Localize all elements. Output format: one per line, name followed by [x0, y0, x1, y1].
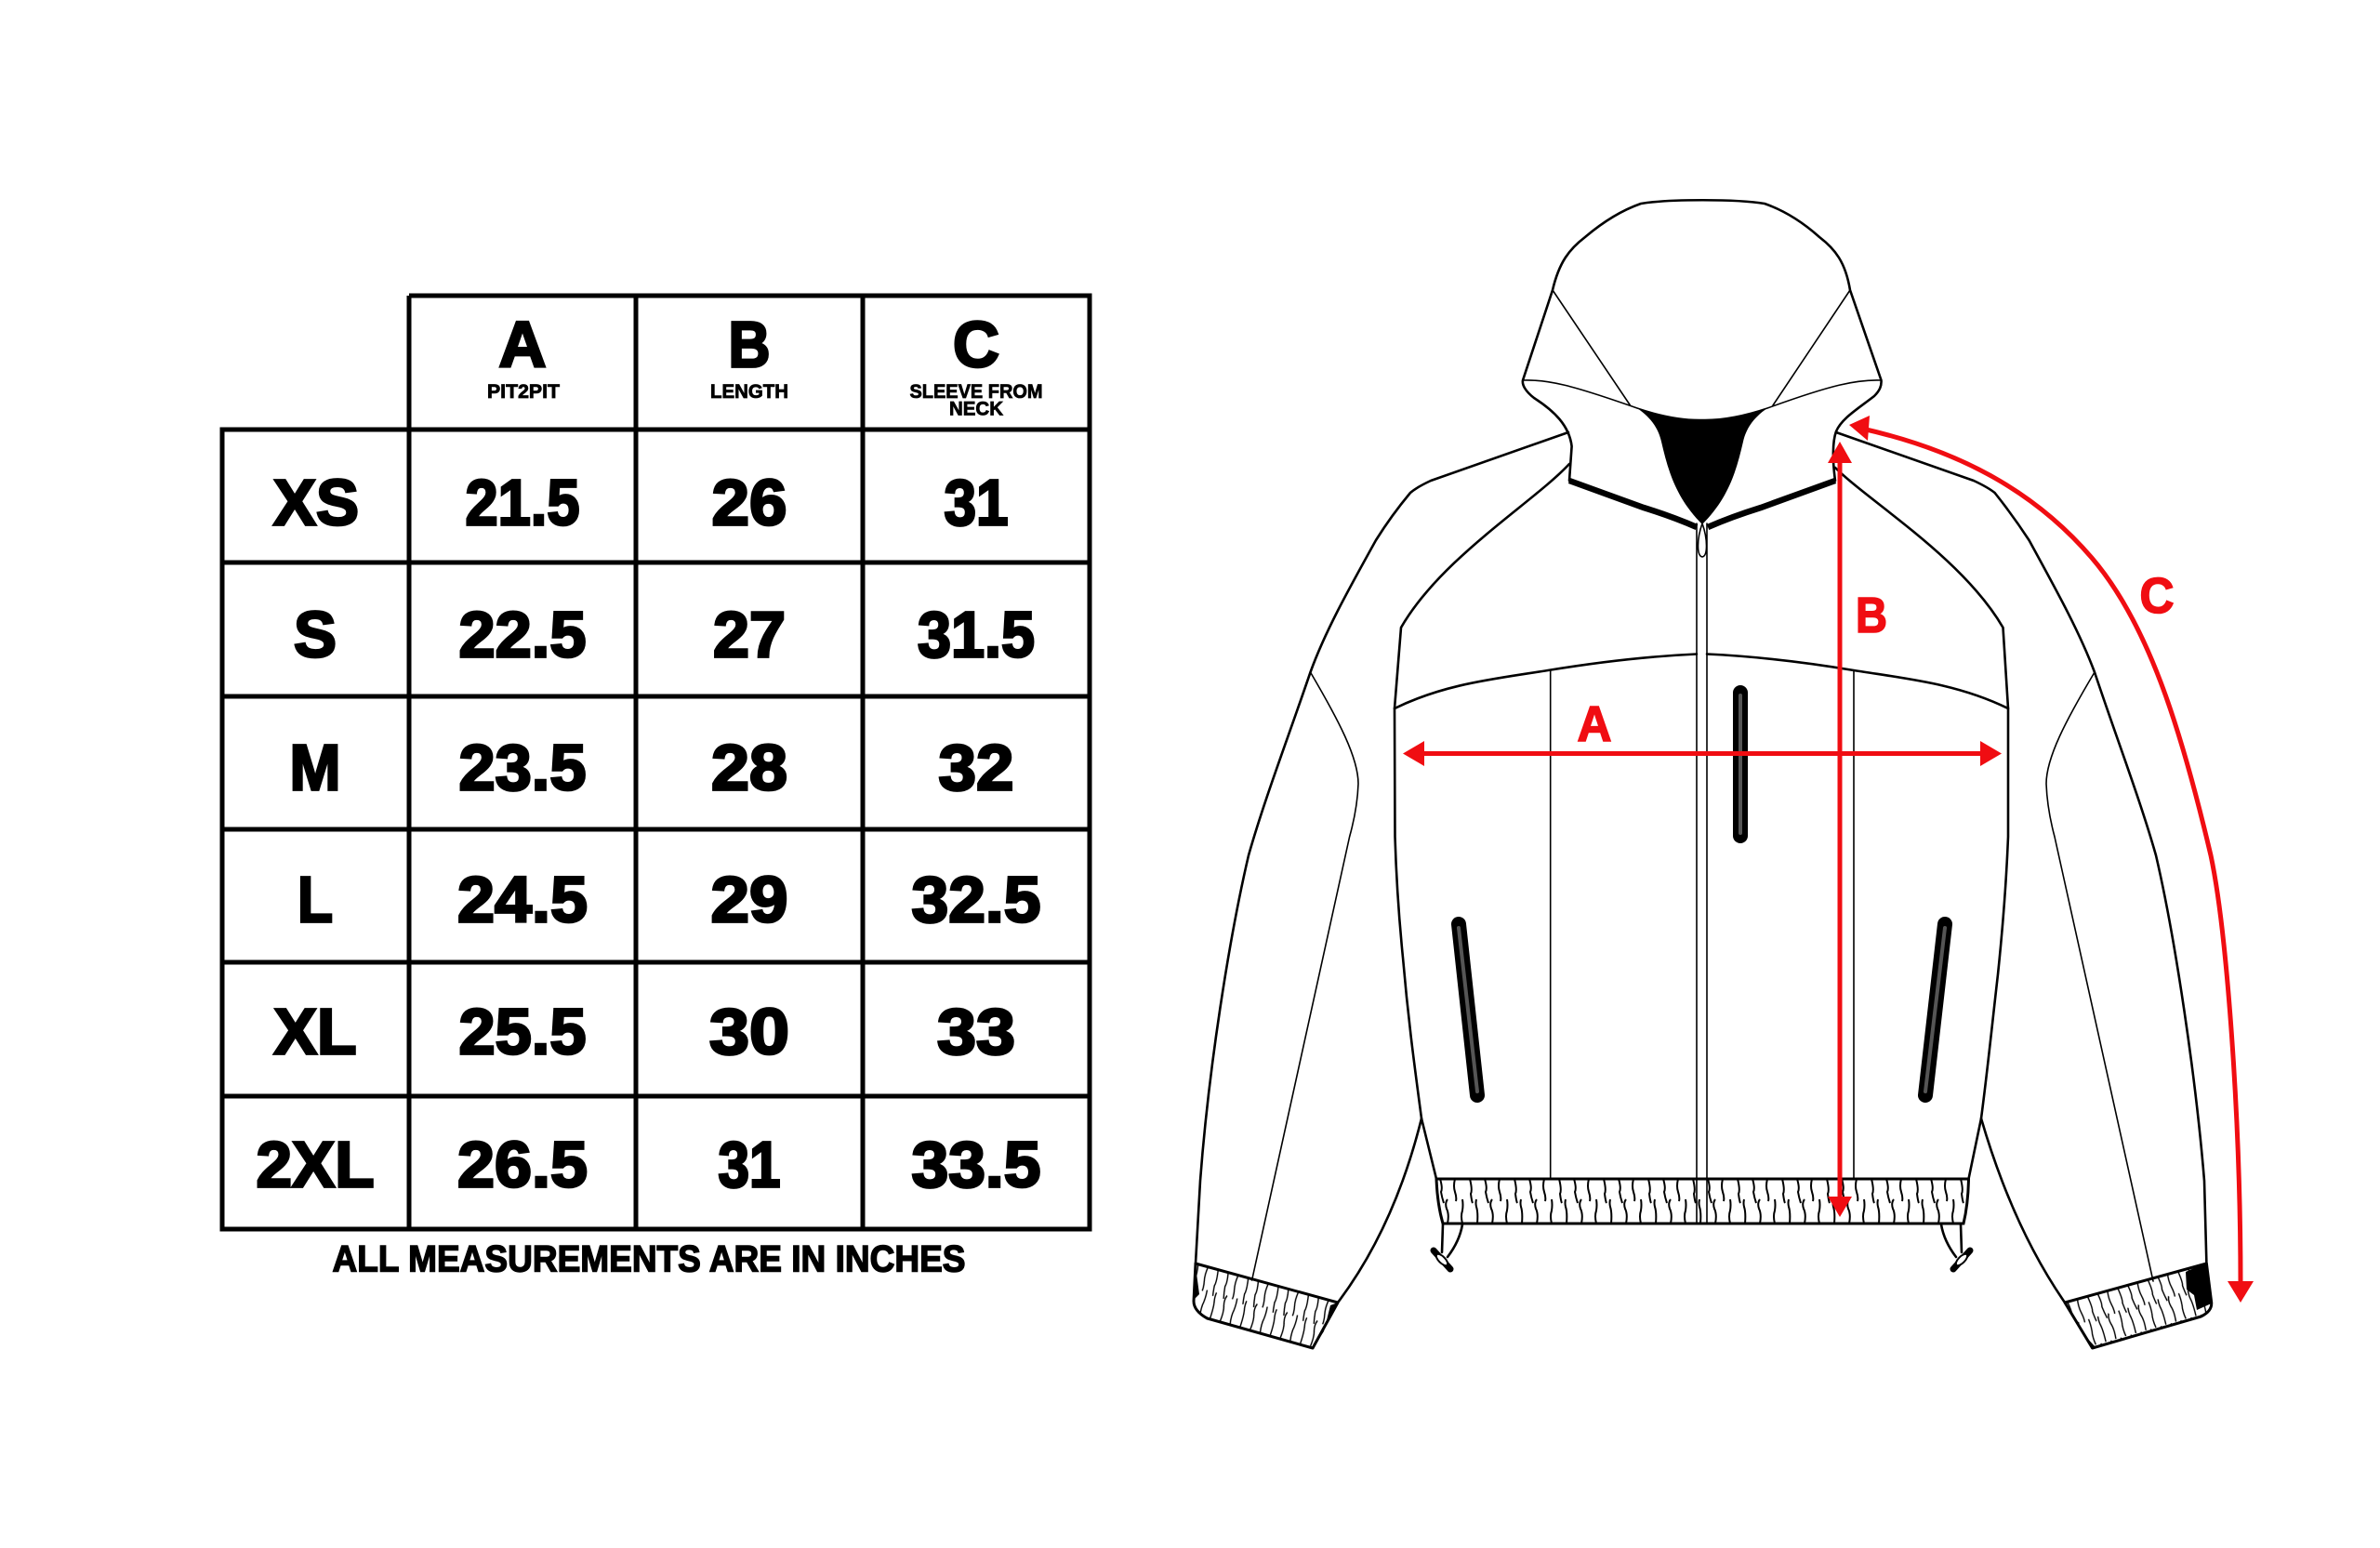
row S: 31.5	[918, 599, 1035, 671]
row XS: 31	[945, 467, 1008, 539]
measurement A arrow	[1403, 741, 2002, 766]
row XS: 26	[712, 467, 787, 539]
row XL: 33	[937, 995, 1015, 1067]
under sleeves	[1338, 1118, 2065, 1303]
header row: A B C	[487, 309, 1043, 420]
row XL: XL	[273, 995, 357, 1067]
row L: 24.5	[457, 863, 588, 935]
front panel seams	[1551, 670, 1854, 1178]
header row: A B C: PIT2PIT	[487, 381, 560, 403]
row M: 23.5	[459, 731, 586, 803]
hood outline	[1523, 200, 1882, 481]
pocket: chest	[1733, 693, 1748, 836]
header row: A B C: NECK	[949, 398, 1003, 420]
row L: 32.5	[911, 863, 1041, 935]
row XS: 21.5	[465, 467, 580, 539]
pocket: right	[1925, 924, 1945, 1095]
header row: A B C: A	[498, 309, 547, 381]
row M: M	[290, 731, 340, 803]
sleeve panel seams	[1252, 672, 2153, 1281]
row XL: 30	[709, 995, 789, 1067]
jacket illustration	[1194, 200, 2212, 1348]
panel: size table	[222, 296, 1090, 1229]
header row: A B C: C	[953, 309, 999, 381]
row 2XL: 26.5	[457, 1129, 588, 1201]
collar trim	[1569, 481, 1835, 527]
drawcord right	[1941, 1224, 1970, 1269]
zipper	[1697, 523, 1707, 1224]
neck lining	[1637, 408, 1767, 524]
row XL	[273, 995, 1015, 1067]
left body side	[1395, 464, 1569, 1179]
hem rib	[1436, 1179, 1969, 1224]
hood seams	[1523, 290, 1882, 420]
row L: 29	[710, 863, 788, 935]
row M: 32	[939, 731, 1013, 803]
row 2XL: 33.5	[911, 1129, 1041, 1201]
row S: 22.5	[459, 599, 586, 671]
pocket: left	[1459, 924, 1477, 1095]
label C: C	[2140, 568, 2174, 624]
header row: A B C: SLEEVE FROM	[909, 381, 1043, 403]
row 2XL: 31	[718, 1129, 781, 1201]
yoke seam	[1395, 655, 2008, 708]
row XS: XS	[273, 467, 359, 539]
row 2XL	[257, 1129, 1041, 1201]
measurement B arrow	[1828, 442, 1852, 1217]
label A: A	[1577, 696, 1612, 752]
left cuff	[1194, 1264, 1338, 1348]
row XL: 25.5	[459, 995, 586, 1067]
row M: 28	[711, 731, 787, 803]
right body side	[1835, 468, 2008, 1179]
table grid	[222, 296, 1090, 1229]
row S: S	[294, 599, 337, 671]
drawcord left	[1434, 1224, 1462, 1269]
label B: B	[1856, 588, 1887, 643]
row L: L	[298, 863, 333, 935]
header row: A B C: B	[729, 309, 770, 381]
outer shoulders and sleeves	[1196, 432, 2206, 1264]
row 2XL: 2XL	[257, 1129, 374, 1201]
cuff shading	[1194, 1263, 2212, 1348]
row S	[294, 599, 1035, 671]
header row: A B C: LENGTH	[710, 381, 788, 403]
row L	[298, 863, 1041, 935]
row M	[290, 731, 1013, 803]
footnote: ALL MEASUREMENTS ARE IN INCHES	[333, 1238, 965, 1279]
row S: 27	[713, 599, 786, 671]
row XS	[273, 467, 1008, 539]
right cuff	[2065, 1264, 2212, 1348]
measurement C arrow	[1849, 416, 2254, 1303]
